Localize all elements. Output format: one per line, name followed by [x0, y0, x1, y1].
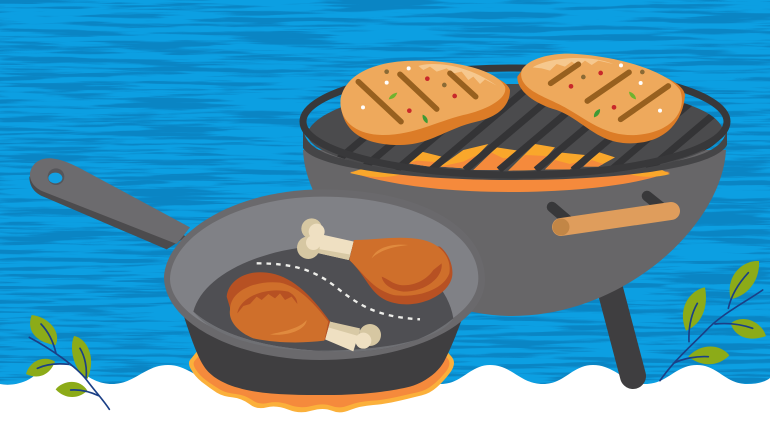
flames	[408, 144, 615, 171]
pan front wall shade	[193, 312, 453, 352]
leaf sprig right	[660, 261, 766, 381]
white wavy ground	[0, 364, 770, 430]
right bun	[517, 54, 685, 143]
grill bowl orange glow	[350, 167, 670, 192]
handle hole opening	[48, 173, 62, 183]
grate bars	[337, 89, 717, 172]
grate surface	[307, 84, 723, 178]
dashed steam path	[257, 263, 420, 319]
grate ring	[303, 68, 727, 175]
frying pan handle	[29, 158, 190, 249]
pan cooking surface	[193, 245, 453, 352]
pan rim	[164, 189, 485, 360]
glow yellow left	[350, 168, 399, 177]
left bun	[340, 61, 510, 145]
handle top face	[30, 158, 190, 244]
leaf sprig left	[26, 315, 109, 409]
grill bowl	[303, 150, 726, 316]
pan outer wall	[184, 317, 462, 395]
pan inner wall	[170, 197, 478, 351]
frying pan body	[164, 189, 485, 395]
grill dish	[303, 125, 727, 180]
orange burner mat	[189, 348, 454, 412]
handle underside	[29, 173, 187, 249]
lower drumstick	[227, 272, 381, 351]
handle end cap	[552, 218, 570, 236]
handle hole	[48, 168, 64, 185]
grill	[303, 54, 770, 376]
grill handle brackets	[552, 196, 667, 224]
upper drumstick	[297, 218, 452, 304]
glow yellow right	[621, 167, 670, 177]
grill wooden handle	[561, 211, 671, 227]
grill leg	[609, 285, 633, 376]
